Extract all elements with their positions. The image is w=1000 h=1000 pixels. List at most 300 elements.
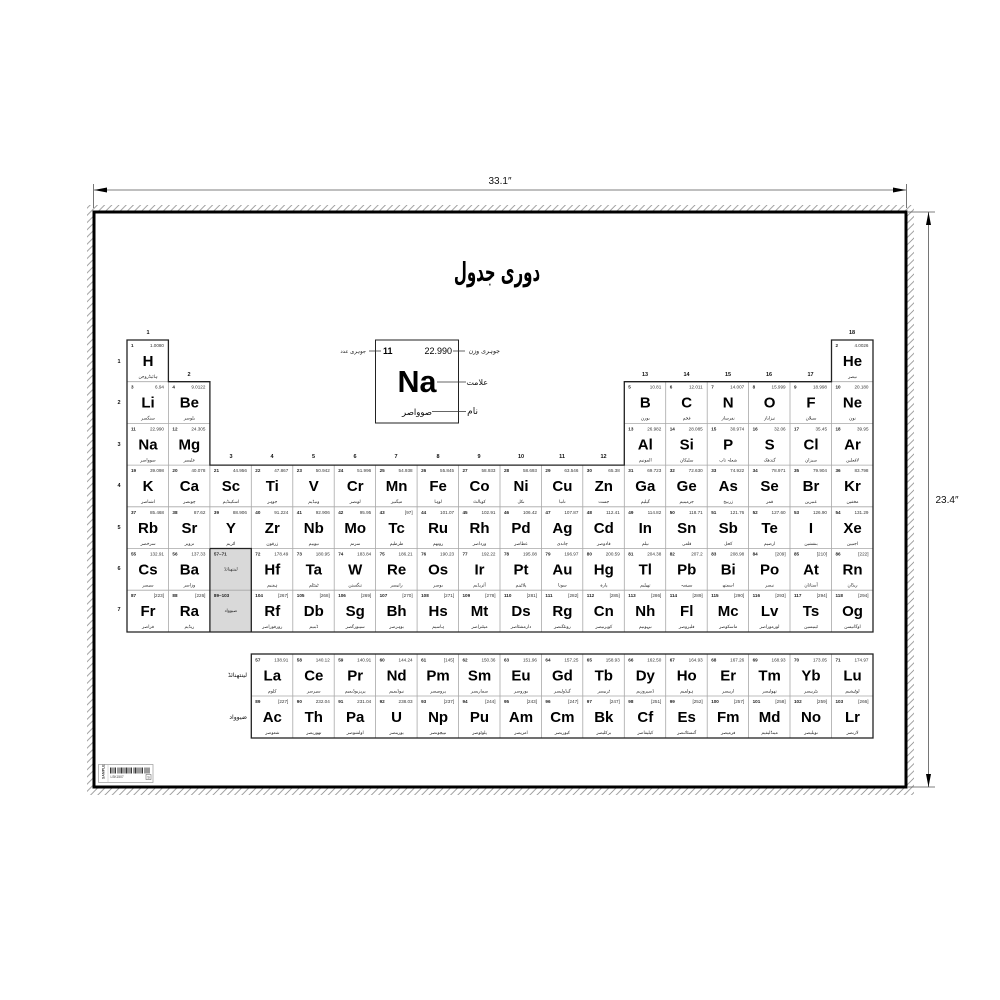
element: Gd: Gd (552, 668, 573, 684)
element: Lv: لورموراصر (759, 625, 780, 630)
element: Md: مینڈلیفیم (761, 731, 778, 736)
element: Rg: 111 (545, 593, 553, 598)
element: Tl (628, 552, 662, 588)
element: Co: Co (470, 478, 490, 495)
element: Al: 26.982 (647, 426, 662, 431)
element: Ar: 18 (836, 426, 841, 431)
element: Mo: سرتم (350, 542, 361, 547)
element: Ne: Ne (843, 395, 862, 412)
element: Ga: 69.723 (647, 468, 662, 473)
element: N: 14.007 (730, 385, 745, 390)
barcode label: S (147, 776, 150, 780)
group numbers: 12 (600, 454, 607, 460)
element: Ra: ریڈیم (185, 625, 194, 630)
element: Yb: 70 (794, 658, 800, 662)
element: N: نفرساز (721, 417, 735, 422)
element: Ge (670, 468, 703, 505)
element: Te (753, 510, 786, 547)
element: Zr: 40 (255, 510, 261, 515)
element: Zn: 65.38 (608, 468, 620, 473)
group numbers: 14 (683, 372, 690, 378)
element: Cu: 63.546 (564, 468, 579, 473)
element: S: 32.06 (774, 426, 786, 431)
period numbers: 1 (117, 359, 121, 365)
element: Rg: Rg (552, 603, 572, 620)
element: As (711, 468, 745, 505)
period numbers: 7 (117, 607, 121, 613)
element: K: 39.098 (150, 468, 164, 473)
element: Md: 101 (753, 699, 761, 704)
element: At: [210] (817, 552, 827, 556)
element: Cd: قادوصر (596, 542, 611, 547)
element: Cr: 24 (338, 468, 344, 473)
element: Er: 167.26 (730, 658, 745, 662)
element: Re: 186.21 (399, 552, 413, 556)
element: Ge: 32 (670, 468, 675, 473)
element: Ts: ٹینیسین (804, 625, 819, 630)
element: As: As (719, 478, 738, 495)
element: At: آستاتان (804, 582, 818, 588)
element: Ho: ہولمیم (680, 690, 694, 694)
element: Rf: [267] (278, 593, 288, 598)
element: Pt: پلاٹینم (516, 584, 527, 588)
element: Au (545, 552, 579, 588)
element: Au: 79 (545, 552, 551, 556)
element: W: 74 (338, 552, 344, 556)
element: Cr (338, 468, 372, 505)
group numbers: 10 (518, 454, 524, 460)
element: Ba: 56 (172, 552, 178, 556)
element: Nb (297, 510, 330, 547)
element: Bi: 208.98 (730, 552, 745, 556)
element: Sn: قلعی (682, 542, 691, 547)
element: Te: 52 (753, 510, 758, 515)
element: Ba (172, 552, 206, 588)
element: Os: بوصر (432, 584, 443, 588)
element: Ti: Ti (266, 478, 279, 495)
element: Se: 78.971 (772, 468, 786, 473)
element: Ge: 72.630 (689, 468, 703, 473)
element: Cs: Cs (138, 562, 158, 578)
element: B: 5 (628, 385, 631, 390)
element: Ce: 140.12 (316, 658, 330, 662)
element: As: 74.922 (730, 468, 745, 473)
element: Xe: Xe (843, 520, 862, 537)
element: La: 57 (255, 658, 261, 662)
group numbers: 5 (312, 454, 315, 460)
element: Cr: Cr (347, 478, 364, 495)
element: Ho: Ho (677, 668, 697, 684)
element: Th: 90 (297, 699, 302, 704)
element: Ca: 20 (172, 468, 178, 473)
element: Ac: [227] (278, 699, 288, 704)
element: Hf: 178.49 (274, 552, 289, 556)
width dimension arrow (94, 184, 906, 208)
element: Ho: 164.93 (689, 658, 703, 662)
element: H (131, 343, 164, 380)
element: Es: Es (678, 709, 696, 726)
element: Dy: 66 (628, 658, 634, 662)
element: Mg: 24.305 (191, 426, 206, 431)
element: C (670, 385, 703, 422)
element: Pm: Pm (426, 668, 450, 684)
element: Ga: گیلیم (641, 499, 651, 505)
element: Sm: سماریصر (470, 690, 488, 694)
element: Rg: [282] (568, 593, 578, 598)
element: Yb: یٹربیصر (803, 690, 819, 694)
element: Kr: 83.798 (854, 468, 869, 473)
element: Nh: [286] (651, 593, 661, 598)
group numbers: 9 (477, 454, 481, 460)
element: No: نوبلیصر (803, 731, 818, 736)
element: Th: Th (305, 709, 323, 726)
element: Pu: 94 (462, 699, 468, 704)
element: Pb: 82 (670, 552, 675, 556)
element: B: بورن (641, 417, 650, 422)
element: Hf: ہفنیم (267, 584, 278, 588)
element: Li: سنگصر (140, 416, 155, 422)
actinide row label: ضیوواد (229, 714, 247, 721)
element: I: بنفشین (804, 542, 818, 547)
element: Er: اربیصر (721, 690, 734, 694)
element: Be: Be (180, 395, 199, 412)
element: Nb: 41 (297, 510, 302, 515)
element: Cr: لونصر (349, 500, 361, 505)
hatched wall around frame (87, 205, 914, 795)
element: Se: قمر (765, 500, 773, 505)
element: Hs (421, 593, 454, 630)
element: Gd: 157.25 (564, 658, 579, 662)
element: B: 10.81 (650, 385, 662, 390)
element: Ga: 31 (628, 468, 634, 473)
group numbers: 4 (270, 454, 274, 460)
element: Eu (504, 658, 537, 694)
element: Sc (214, 468, 247, 505)
element: Gd: گیڈولیصر (553, 688, 572, 694)
element: Db: 105 (297, 593, 305, 598)
element: Fe: Fe (429, 478, 447, 495)
element: Ga: Ga (635, 478, 656, 495)
height label: 23.4″ (935, 495, 959, 506)
element: Pm: پرومیصر (429, 690, 447, 694)
element: Sg: سیبورگصر (345, 624, 365, 630)
element: Se: Se (760, 478, 779, 495)
element: Ru: Ru (428, 520, 448, 537)
element: La: La (264, 668, 282, 684)
placeholder: actinides: 89–103 (214, 593, 230, 598)
element: Cl: 35.45 (816, 426, 827, 431)
element: Tl: 81 (628, 552, 634, 556)
element: Po: Po (760, 562, 779, 578)
element: Ge: Ge (677, 478, 697, 495)
element: H: ہائیڈروجن (138, 375, 158, 380)
element: Zn: Zn (595, 478, 613, 495)
element: Am (504, 699, 537, 736)
element: Nd: 144.24 (399, 658, 413, 662)
element: Mo (338, 510, 372, 547)
element: Es: [252] (692, 699, 703, 704)
element: Kr: 36 (836, 468, 841, 473)
element: Lr (836, 699, 868, 736)
element: Hs: [271] (444, 593, 454, 598)
element: Tb: Tb (595, 668, 613, 684)
element: Cn: کوپرنیصر (594, 624, 613, 630)
element: S: S (765, 436, 775, 453)
barcode label: SAMPLE (102, 764, 106, 779)
element: Fl: 114 (670, 593, 678, 598)
element: Be: 9.0122 (191, 385, 206, 390)
element: Y (214, 510, 247, 547)
element: Xe: 54 (836, 510, 841, 515)
element: In: 114.82 (648, 510, 662, 515)
element: Kr (836, 468, 869, 505)
element: Cm: کیوریصر (554, 730, 571, 736)
element: Bk: Bk (594, 709, 614, 726)
element: No: No (801, 709, 821, 726)
element: Li (131, 385, 164, 422)
element: Mn: 25 (380, 468, 385, 473)
element: Kr: مخفین (846, 500, 859, 505)
element: Db: [268] (320, 593, 330, 598)
element: K: اشناصر (140, 500, 155, 505)
element: Cn: Cn (594, 603, 614, 620)
element: Pb: Pb (677, 562, 696, 578)
element: Mo: Mo (344, 520, 366, 537)
element: Pa: 91 (338, 699, 344, 704)
element: Na: 22.990 (150, 426, 164, 431)
element: Ne: نون (849, 417, 856, 422)
element: Mt: Mt (471, 603, 488, 620)
element: Sb: 51 (711, 510, 717, 515)
element: Pr: 140.91 (357, 658, 372, 662)
element: He: 4.0026 (854, 343, 869, 348)
element: Pr: 59 (338, 658, 344, 662)
element: Lu: لوٹیشیم (845, 690, 860, 694)
element: Po: 84 (753, 552, 758, 556)
element: Po: [209] (775, 552, 786, 556)
element: Fl: Fl (680, 603, 693, 620)
element: Pb (670, 552, 703, 588)
element: V: ونیڈیم (308, 500, 319, 505)
height dimension arrow (908, 212, 935, 787)
element: Pa: 231.04 (357, 699, 372, 704)
element: Ar: 39.95 (857, 426, 869, 431)
element: Rb: 85.468 (150, 510, 164, 515)
element: Sc: اسکینڈیم (223, 499, 239, 505)
element: He: 2 (836, 343, 838, 348)
element: Pd: 46 (504, 510, 510, 515)
element: Ba: Ba (180, 562, 200, 578)
element: Sr: Sr (181, 520, 197, 537)
element: Ds: دارمشٹاصر (510, 625, 531, 630)
element: Fe (421, 468, 455, 505)
element: Ac: شعوصر (264, 731, 280, 736)
element: U: 238.03 (399, 699, 413, 704)
lanthanide and actinide grid lines (251, 654, 873, 738)
group numbers: 17 (807, 372, 814, 378)
element: Yb (794, 658, 827, 694)
element: Og: اوگانیسن (844, 624, 861, 630)
element: Co: کوبالٹ (473, 499, 487, 505)
placeholder: lanthanides (214, 552, 238, 572)
element: Sr: 87.62 (194, 510, 206, 515)
element: Tb: 65 (587, 658, 592, 662)
element: Lv: Lv (761, 603, 779, 620)
element: Pu: Pu (470, 709, 489, 726)
element: In: In (639, 520, 652, 537)
element: Og: 118 (836, 593, 843, 598)
element: Am: Am (509, 709, 533, 726)
element: Ni: Ni (514, 478, 528, 495)
element: Rn: ریڈان (847, 584, 858, 588)
element: Mt: 109 (462, 593, 471, 598)
element: Zr (255, 510, 289, 547)
element: Np: Np (428, 709, 448, 726)
element: Sn (670, 510, 703, 547)
placeholder: actinides (214, 593, 237, 614)
legend: sample element key (340, 340, 500, 423)
element: Ra (172, 593, 205, 630)
element: Ho (670, 658, 703, 694)
element: Ne: 20.180 (854, 385, 869, 390)
element: Ge: جرمینیم (680, 500, 694, 505)
element: Nb: Nb (304, 520, 324, 537)
element: Mg: Mg (179, 436, 200, 453)
element: Tm: 168.93 (772, 658, 786, 662)
element: Ts (794, 593, 827, 630)
element: Dy (628, 658, 662, 694)
title: دوری جدول (454, 258, 540, 288)
element: Ru: 44 (421, 510, 427, 515)
element: C: C (681, 395, 692, 412)
element: Rg (545, 593, 578, 630)
element: Ac: Ac (263, 709, 282, 726)
element: Tc: Tc (388, 520, 405, 537)
element: P: P (723, 436, 733, 453)
element: Xe (836, 510, 869, 547)
element: Fm: [257] (734, 699, 744, 704)
element: Al: 13 (628, 426, 634, 431)
element: Fl: [289] (692, 593, 703, 598)
element: Fl: فلیروصر (678, 625, 694, 630)
element: Rf: 104 (255, 593, 263, 598)
element: Mc: Mc (718, 603, 739, 620)
element: Ir: آئریڈیم (473, 582, 487, 588)
element: Ru: روتھم (433, 542, 443, 547)
element: Np: 93 (421, 699, 427, 704)
element: Ar: Ar (844, 436, 861, 453)
group numbers: 16 (766, 372, 772, 378)
element: F: سیلان (806, 417, 817, 422)
element: O: 15.999 (772, 385, 786, 390)
element: Er: Er (720, 668, 736, 684)
element: No: 102 (794, 699, 802, 704)
element: Og (836, 593, 868, 630)
element: Hg: 80 (587, 552, 592, 556)
element: Sc: 44.956 (233, 468, 247, 473)
element: Mg (172, 426, 206, 463)
element: Cm: 96 (545, 699, 551, 704)
element: Ac (255, 699, 288, 736)
element: Ti: جوہر (266, 500, 278, 505)
element: C: 6 (670, 385, 673, 390)
element: Al: Al (638, 436, 653, 453)
element: Bh: [270] (402, 593, 413, 598)
element: Y: Y (226, 520, 236, 537)
element: Fm: 100 (711, 699, 719, 704)
element: O: تیزاباز (763, 417, 776, 422)
group numbers: 2 (187, 372, 191, 378)
element: Bk: برکلیصر (595, 730, 611, 736)
element: Cu (545, 468, 579, 505)
element: V: 23 (297, 468, 302, 473)
element: Sc: 21 (214, 468, 219, 473)
element: Th: تھوریصر (305, 731, 322, 736)
element: Si: 28.085 (689, 426, 703, 431)
element: Rh: 45 (462, 510, 468, 515)
element: Rh: Rh (470, 520, 490, 537)
element: Ce: 58 (297, 658, 302, 662)
element: Nh: 113 (628, 593, 636, 598)
element: Rb (131, 510, 164, 547)
element: Bh: بوہرصر (388, 625, 404, 630)
period numbers: 6 (117, 566, 121, 572)
element: Ga (628, 468, 662, 505)
element: As: زرنیخ (723, 500, 733, 505)
element: Fr: Fr (140, 603, 156, 620)
element: V: 50.942 (316, 468, 330, 473)
element: Cu: تانبا (559, 500, 566, 505)
element: Co: 58.933 (481, 468, 496, 473)
element: Ru (421, 510, 455, 547)
element: Si: 14 (670, 426, 675, 431)
element: Mn (380, 468, 413, 505)
element: Mo: 95.95 (360, 510, 372, 515)
element: Hf: Hf (264, 562, 281, 578)
element: Ag: 47 (545, 510, 551, 515)
element: Sn: Sn (677, 520, 696, 537)
element: Og: Og (842, 603, 863, 620)
element: Li: 3 (131, 385, 134, 390)
element: Lr: Lr (845, 709, 860, 726)
element: Pa (338, 699, 372, 736)
element: Fr: 87 (131, 593, 137, 598)
element: Be: بلوصر (183, 417, 195, 422)
element: Re: رانیصر (390, 584, 403, 588)
element: Dy: Dy (636, 668, 656, 684)
element: Tm (753, 658, 786, 694)
element: Tl: Tl (639, 562, 652, 578)
element: Dy: ڈسپروزیم (636, 690, 654, 694)
element: Se: 34 (753, 468, 758, 473)
element: Sr: تزویر (184, 542, 195, 547)
element: Nb: نیوبیم (309, 542, 319, 547)
barcode label: LSK1507 (110, 775, 124, 779)
element: Lv (753, 593, 786, 630)
element: Ni (504, 468, 537, 505)
element: Ds: Ds (511, 603, 531, 620)
element: Es (670, 699, 703, 736)
element: Ts: [294] (817, 593, 827, 598)
element: Cn: [285] (610, 593, 620, 598)
group numbers: 1 (146, 330, 150, 336)
element: I: I (809, 520, 813, 537)
element: N: N (723, 395, 734, 412)
element: Lu: Lu (843, 668, 862, 684)
element: Bi: اسمتھ (722, 584, 734, 588)
element: Tl: 204.38 (647, 552, 662, 556)
element: Tc: 43 (380, 510, 385, 515)
